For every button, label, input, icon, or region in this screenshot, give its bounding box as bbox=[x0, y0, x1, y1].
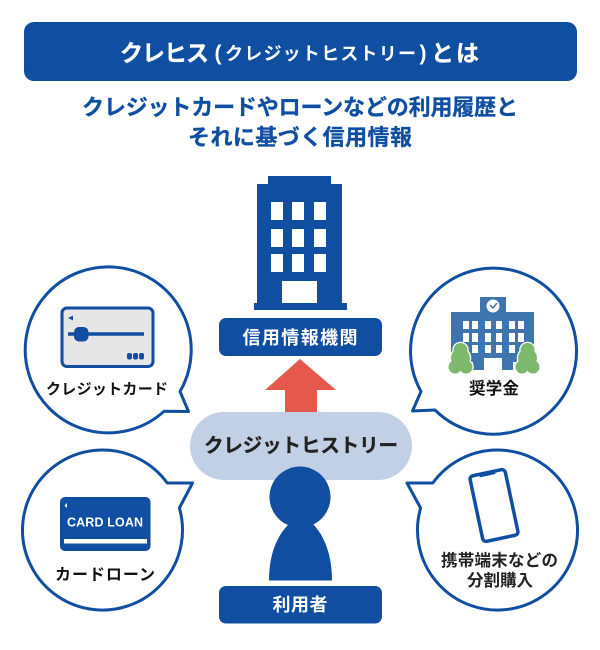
icon: loan card bbox=[60, 497, 150, 551]
credit history pill: クレジットヒストリー bbox=[204, 435, 398, 457]
label: scholarship: 奨学金 bbox=[469, 378, 520, 398]
icon: smartphone bbox=[469, 469, 519, 542]
label: credit bureau: 信用情報機関 bbox=[242, 328, 358, 348]
subtitle bbox=[82, 95, 518, 150]
icon: left tree bbox=[448, 343, 472, 374]
title banner: ) bbox=[420, 42, 426, 65]
label: mobile device installment bbox=[441, 551, 558, 590]
title banner: ( bbox=[214, 42, 222, 65]
subtitle: それに基づく信用情報 bbox=[188, 125, 412, 150]
panel: mobile device installment bubble bbox=[407, 450, 578, 610]
label: credit card: クレジットカード bbox=[46, 381, 168, 398]
panel: scholarship bubble bbox=[411, 268, 577, 434]
title banner: クレジットヒストリー bbox=[225, 44, 416, 64]
icon: office building bbox=[254, 176, 347, 310]
panel: card loan bubble bbox=[22, 450, 192, 610]
icon: user bbox=[269, 466, 332, 580]
title banner: とは bbox=[431, 40, 479, 66]
title banner bbox=[24, 22, 577, 81]
icon: credit card bbox=[62, 308, 153, 366]
icon: loan card: CARD LOAN bbox=[67, 516, 143, 530]
icon: school bbox=[448, 297, 540, 374]
credit history pill bbox=[190, 412, 412, 480]
label: credit bureau bbox=[219, 318, 382, 356]
label: mobile device installment: 分割購入 bbox=[467, 571, 534, 590]
title banner: クレヒス bbox=[120, 40, 209, 66]
label: mobile device installment: 携帯端末などの bbox=[441, 551, 558, 570]
label: user: 利用者 bbox=[272, 595, 328, 615]
icon: right tree bbox=[516, 343, 540, 374]
subtitle: クレジットカードやローンなどの利用履歴と bbox=[82, 95, 518, 120]
label: user bbox=[219, 586, 382, 624]
panel: credit card bubble bbox=[25, 267, 191, 433]
arrow: up to credit bureau bbox=[265, 359, 336, 413]
label: card loan: カードローン bbox=[55, 566, 155, 584]
